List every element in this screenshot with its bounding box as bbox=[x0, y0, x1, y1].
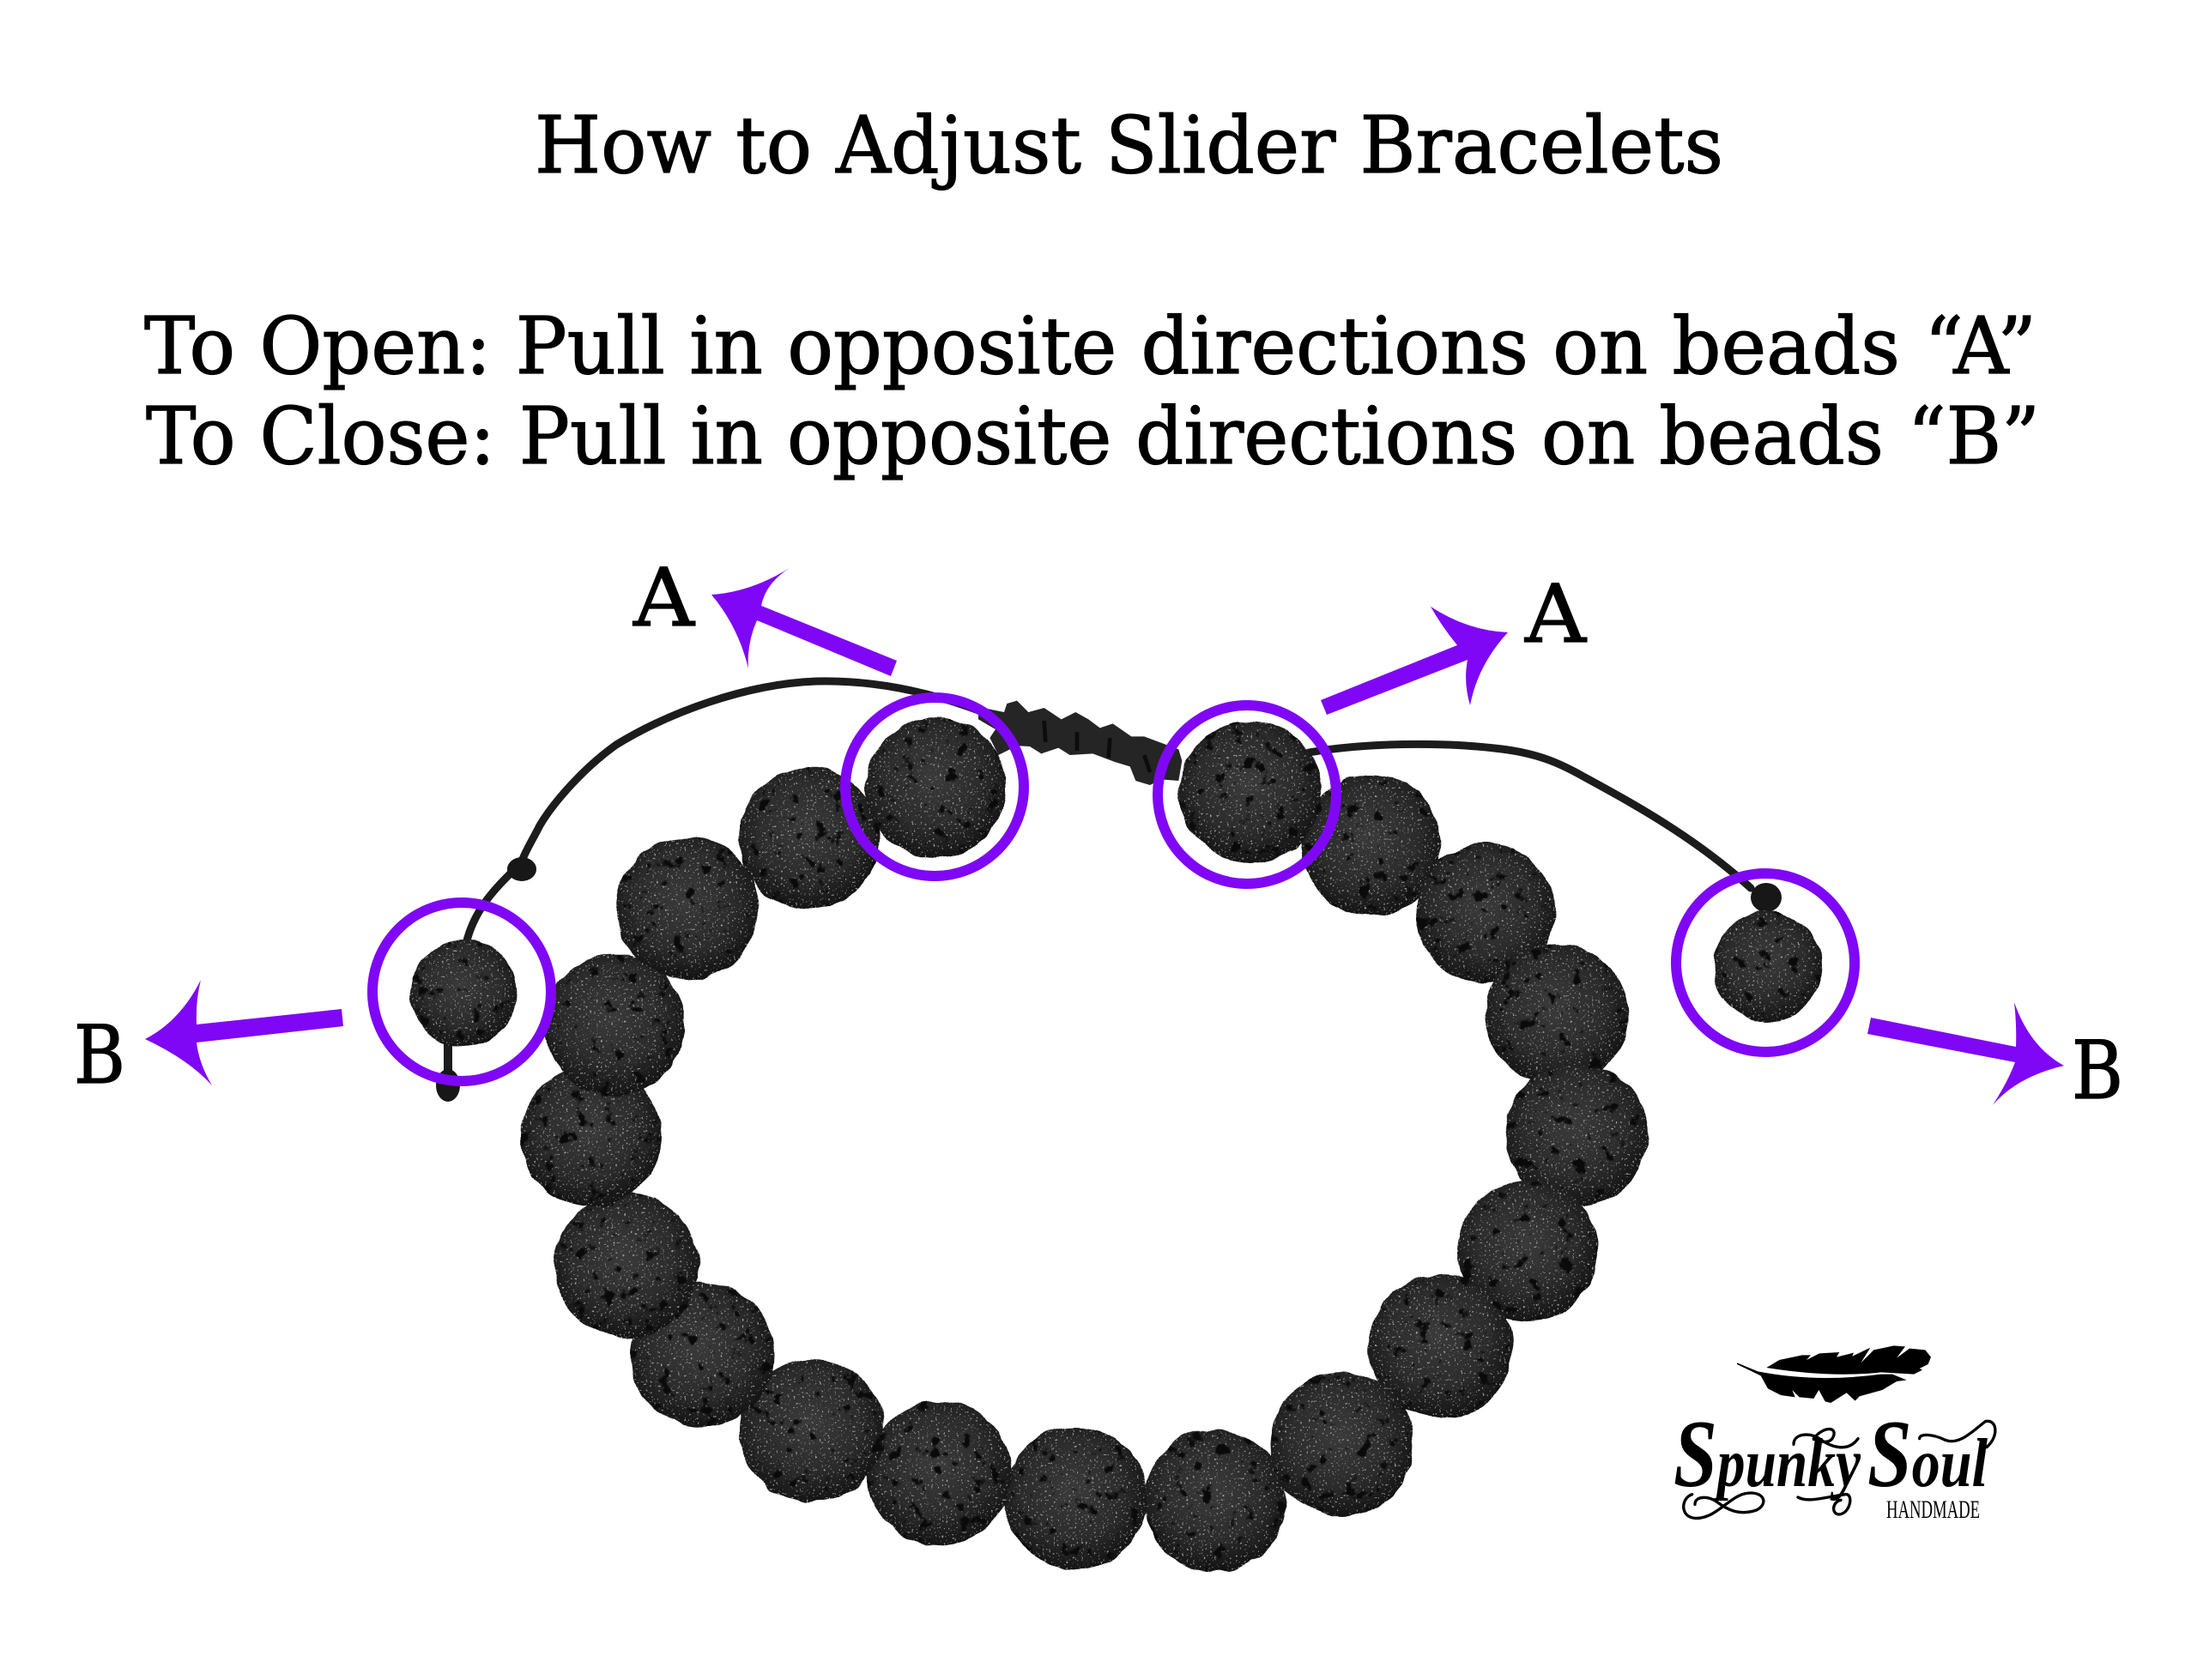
instructions bbox=[144, 300, 2040, 482]
arrow: B left bbox=[145, 980, 343, 1085]
title: How to Adjust Slider Bracelets bbox=[535, 100, 1723, 191]
circle: right small bead bbox=[1676, 873, 1855, 1052]
lava beads bbox=[410, 717, 1823, 1572]
cord knot right bbox=[1751, 883, 1782, 912]
logo: Spunky Soul Handmade bbox=[1673, 1345, 1995, 1524]
bracelet photo bbox=[410, 681, 1823, 1572]
icon: feather bbox=[1737, 1345, 1931, 1403]
circle: top left bead bbox=[845, 698, 1024, 876]
circle: left small bead bbox=[372, 903, 551, 1081]
arrow: B right bbox=[1867, 1002, 2064, 1105]
logo wordmark: Soul: Soul bbox=[1867, 1401, 1988, 1508]
label: A left: A bbox=[632, 552, 695, 645]
logo swashes bbox=[1684, 1421, 1995, 1518]
cords bbox=[448, 681, 1751, 1077]
logo wordmark: Spunky: Spunky bbox=[1673, 1401, 1861, 1508]
logo tagline: HANDMADE bbox=[1886, 1496, 1980, 1524]
cord end left bbox=[436, 1069, 460, 1102]
sliding knot bbox=[978, 701, 1182, 785]
arrow: A left bbox=[711, 568, 897, 676]
label: A right: A bbox=[1524, 568, 1587, 662]
instruction: to open: To Open: Pull in opposite directions on beads “A” bbox=[144, 300, 2037, 392]
circle: top right bead bbox=[1158, 705, 1336, 884]
cord knot left bbox=[507, 857, 536, 881]
label: B left: B bbox=[74, 1009, 125, 1103]
instruction: to close: To Close: Pull in opposite directions on beads “B” bbox=[146, 390, 2040, 482]
arrow: A right bbox=[1321, 607, 1508, 715]
label: B right: B bbox=[2072, 1024, 2123, 1118]
